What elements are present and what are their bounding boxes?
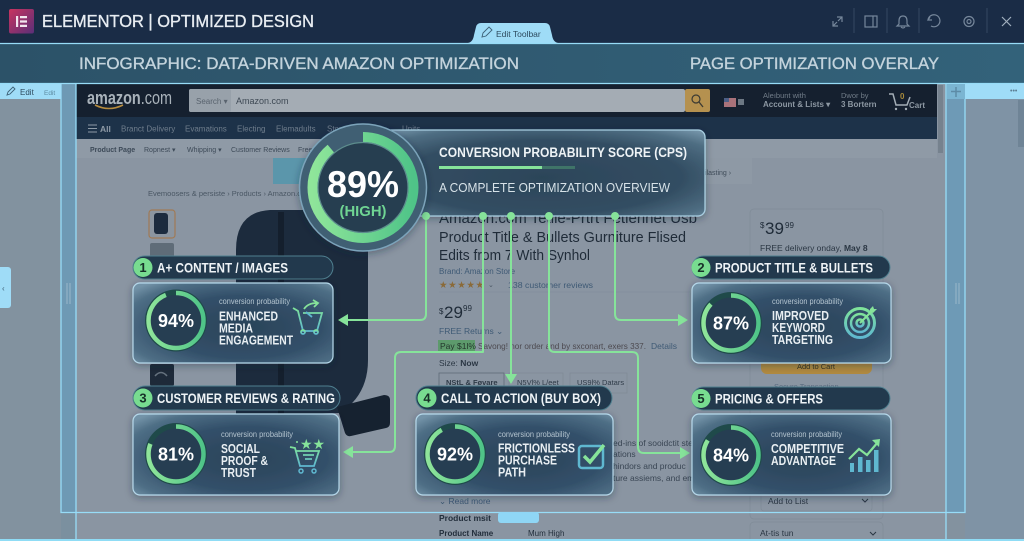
price	[439, 303, 472, 322]
product title: Brand: Amazon Store	[439, 267, 516, 276]
read more: ⌄ Read more	[439, 496, 491, 506]
amazon nav: Electing	[237, 124, 265, 134]
product image	[236, 210, 390, 436]
card 5 heading pill: 5	[697, 391, 705, 406]
connector to card 2	[615, 216, 688, 326]
card 5 gauge	[700, 424, 762, 486]
amazon logo: amazon.com	[87, 88, 172, 108]
side collapse tab	[0, 267, 11, 308]
thumbnails	[149, 210, 175, 386]
card 1 heading pill: 1	[139, 260, 147, 275]
product title	[439, 211, 697, 276]
card 3 text: PROOF &	[221, 454, 268, 468]
card 2 heading pill: 2	[697, 260, 705, 275]
elementor logo	[9, 9, 34, 34]
description text: hindors and produc	[613, 461, 687, 471]
description text: ture assiems, and ema	[613, 473, 699, 483]
size options: US9l% Datars	[577, 378, 624, 387]
product title: Edits from 7 With Synhol	[439, 248, 590, 264]
search bar: Search ▾	[196, 97, 228, 106]
rating: ⌄	[488, 282, 494, 289]
icon: target	[846, 306, 877, 338]
cart: 0	[900, 92, 905, 101]
card 4 heading pill: 4	[423, 390, 431, 406]
card 5 text	[771, 429, 844, 468]
amazon page mockup	[76, 84, 937, 541]
amazon sub nav: Customer Reviews	[231, 147, 290, 154]
amazon nav	[76, 117, 937, 139]
hero subheading: A COMPLETE OPTIMIZATION OVERVIEW	[439, 180, 671, 195]
infographic heading: INFOGRAPHIC: DATA-DRIVEN AMAZON OPTIMIZATION	[79, 55, 519, 73]
buy box: FREE delivery onday, May 8	[760, 243, 868, 253]
card 2 heading pill	[692, 256, 890, 279]
buy box	[750, 209, 883, 541]
hero score gauge	[300, 124, 426, 251]
product details: Product Name	[439, 529, 494, 538]
card 2 text	[772, 296, 844, 347]
card 3 gauge: 81%	[158, 444, 194, 464]
right edit tab	[947, 84, 1024, 99]
amazon nav: Store	[327, 124, 347, 134]
left edit tab	[0, 84, 61, 99]
product details: Mum High	[528, 529, 564, 538]
card 1 text: ENGAGEMENT	[219, 334, 293, 348]
card 4 body	[416, 414, 613, 495]
buy box: Secure Transaction	[774, 382, 839, 391]
edit toolbar tab: Edit Toolbar	[496, 29, 541, 39]
size options	[439, 373, 627, 393]
amazon sub nav: Ropnest ▾	[144, 147, 176, 154]
amazon nav: Units	[402, 124, 420, 134]
card 2 gauge	[700, 292, 762, 354]
icon: cart with arrow	[293, 300, 322, 334]
price: $	[439, 307, 444, 316]
card 1 text: ENHANCED	[219, 310, 278, 324]
buy box: 39	[765, 219, 784, 238]
connector lines	[338, 216, 690, 459]
card 3 heading pill: CUSTOMER REVIEWS & RATING	[157, 391, 335, 406]
search bar	[189, 89, 710, 112]
connector to card 1	[338, 216, 426, 326]
card 5 body	[692, 414, 891, 495]
card 5 heading pill	[692, 387, 890, 410]
card 1 text	[219, 296, 293, 348]
window controls	[833, 8, 1011, 33]
app title: ELEMENTOR | OPTIMIZED DESIGN	[42, 11, 314, 31]
icon: cart with stars: ★★	[300, 436, 325, 452]
rating: ★★★★★	[439, 280, 484, 291]
card 2 text: conversion probability	[772, 296, 844, 306]
amazon header bar	[76, 84, 937, 117]
amazon nav: Elemadults	[276, 124, 316, 134]
card 1: A+ content	[133, 256, 333, 363]
product details	[439, 513, 564, 538]
card 3 text: TRUST	[221, 466, 256, 480]
icon: growth chart	[849, 439, 880, 472]
card 2 text: TARGETING	[772, 333, 833, 347]
card 1 gauge: 94%	[158, 311, 194, 331]
hero progress bar	[439, 166, 575, 169]
card 1 text: MEDIA	[219, 322, 253, 336]
buy box: Add to Cart	[797, 362, 836, 371]
price: 29	[444, 303, 463, 322]
product title: Amazon.com Tetile-Prtrt Fetlerinet Usb	[439, 211, 697, 227]
account links: Aleıbunt with	[763, 91, 806, 100]
buy box: 99	[785, 221, 794, 230]
hero score label: (HIGH)	[340, 203, 386, 220]
description text	[613, 438, 699, 483]
card 4 gauge: 92%	[437, 444, 473, 464]
buy box: At-tis tun	[760, 528, 794, 538]
card 4 heading pill	[416, 386, 612, 410]
offer line: Details	[651, 341, 677, 351]
returns: FREE Returns ⌄	[439, 326, 503, 336]
size options: NStL & Føvare	[446, 378, 498, 387]
card 2: product title and bullets	[692, 256, 891, 363]
card 4 text: PATH	[498, 466, 526, 480]
owner name: 3 Bortern	[841, 100, 877, 109]
icon: cart with stars	[290, 436, 325, 473]
amazon sub nav: Whipping ▾	[187, 147, 222, 154]
card 4 text: conversion probability	[498, 429, 571, 439]
connector to card 5	[549, 216, 690, 459]
hero heading: CONVERSION PROBABILITY SCORE (CPS)	[439, 145, 687, 160]
left edit tab: Edit	[44, 90, 55, 97]
card 2 text: IMPROVED	[772, 309, 829, 323]
card 1 text: conversion probability	[219, 296, 291, 306]
card 3 text	[221, 429, 294, 480]
card 2 gauge: 87%	[713, 314, 749, 334]
icon: checkbox	[579, 445, 604, 468]
rating	[439, 280, 690, 292]
cart	[889, 92, 925, 110]
account and lists: Account & Lists ▾	[763, 100, 831, 109]
amazon nav: Evamations	[185, 124, 227, 134]
amazon sub nav: Free	[298, 147, 312, 154]
hero score panel	[380, 130, 705, 220]
left edit tab: Edit	[20, 88, 35, 97]
card 3 heading pill: 3	[139, 390, 147, 406]
card 2 heading pill: PRODUCT TITLE & BULLETS	[715, 260, 873, 276]
card 5 text: COMPETITIVE	[771, 442, 844, 456]
card 4 text	[498, 429, 575, 480]
amazon nav: Branct Delivery	[121, 124, 175, 134]
overlay heading: PAGE OPTIMIZATION OVERLAY	[690, 55, 939, 73]
breadcrumb: Evemoosers & persiste › Products › Amazon.com	[148, 189, 311, 198]
card 5 text: ADVANTAGE	[771, 454, 836, 468]
size options: N5Vl% L/eet	[517, 378, 560, 387]
title band	[0, 44, 1024, 83]
buy box: Add to List	[768, 496, 809, 506]
card 5: pricing and offers	[692, 387, 891, 495]
cart: Cart	[909, 101, 925, 110]
card 3: customer reviews	[133, 386, 340, 495]
description text: ed-ins of sooidctit ste	[613, 438, 693, 448]
connector dots	[422, 212, 619, 220]
product details: Product msit	[439, 513, 491, 523]
card 2 body	[692, 283, 891, 363]
connector to card 3	[343, 216, 483, 458]
amazon nav: All	[100, 124, 111, 134]
card 1 heading pill	[133, 256, 333, 279]
description text: ations	[613, 449, 636, 459]
owner: Dwor by	[841, 91, 869, 100]
product title: Product Title & Bullets Gurniture Flised	[439, 230, 686, 246]
search bar: Amazon.com	[236, 96, 289, 106]
card 1 gauge	[145, 290, 207, 352]
promo banner	[273, 158, 752, 184]
card 1 body	[133, 283, 333, 363]
connector to card 4	[505, 216, 517, 384]
offer line: Pay $1l%	[440, 341, 476, 351]
promo banner: ilasting ›	[705, 170, 732, 177]
card 1 heading pill: A+ CONTENT / IMAGES	[157, 260, 288, 276]
offer line: Savong! nor order and by sxconart, exers 337.	[478, 341, 646, 351]
card 4: call to action	[416, 386, 613, 495]
size: Size: Now	[439, 358, 479, 368]
amazon sub nav	[76, 139, 937, 158]
card 4 text: FRICTIONLESS	[498, 442, 575, 456]
side collapse tab: ‹	[2, 284, 5, 293]
amazon sub nav: Product Page	[90, 147, 135, 154]
card 4 heading pill: CALL TO ACTION (BUY BOX)	[441, 391, 601, 406]
buy box: $	[760, 221, 765, 230]
card 3 heading pill	[133, 386, 340, 410]
card 2 text: KEYWORD	[772, 321, 825, 335]
card 3 text: SOCIAL	[221, 442, 260, 456]
rating: 138 customer reviews	[508, 280, 593, 290]
card 4 text: PURCHASE	[498, 454, 557, 468]
card 3 gauge	[145, 423, 207, 485]
resize handles	[67, 283, 959, 304]
card 3 text: conversion probability	[221, 429, 294, 439]
card 5 heading pill: PRICING & OFFERS	[715, 392, 823, 406]
top bar	[0, 0, 1024, 43]
flag	[724, 98, 744, 107]
card 5 text: conversion probability	[771, 429, 843, 439]
right edit tab: •••	[1010, 88, 1018, 95]
card 4 gauge	[424, 423, 486, 485]
edit toolbar tab	[468, 23, 558, 43]
hero score value: 89%	[327, 164, 399, 205]
bottom tab	[498, 512, 539, 523]
price: 99	[463, 304, 472, 313]
offer line	[438, 340, 677, 352]
card 5 gauge: 84%	[713, 446, 749, 466]
card 3 body	[133, 414, 339, 495]
